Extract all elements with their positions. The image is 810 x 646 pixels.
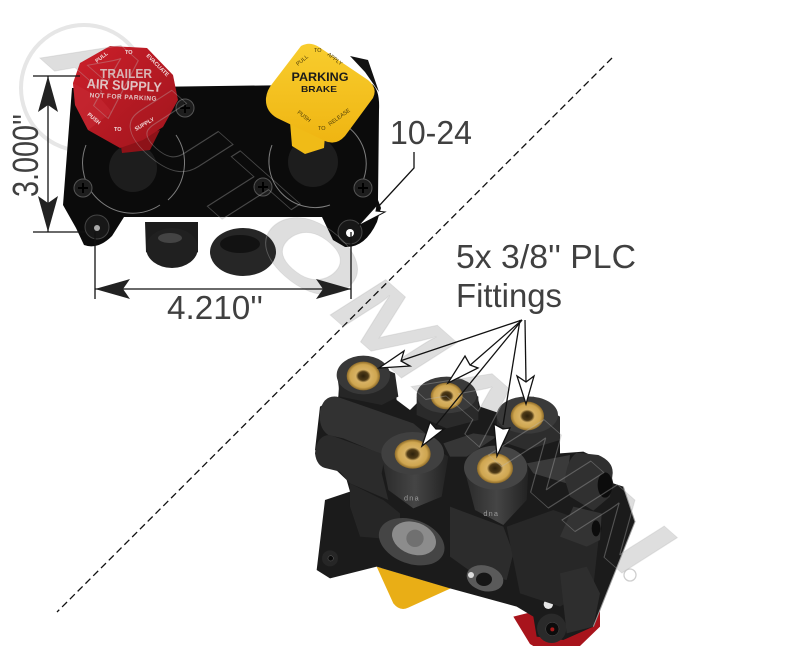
callout: 10-24 thread [358,114,472,226]
dimension: 3.000 height [5,76,85,232]
red knob: trailer air supply: AIR SUPPLY [86,76,162,95]
watermark logo: AUTOMANN [27,0,691,601]
top view: dash valve [63,44,381,276]
PLC fitting 1 [337,356,398,405]
yellow knob: parking brake: TO [314,48,322,54]
yellow knob: parking brake: APPLY [326,52,343,67]
watermark logo [21,0,691,601]
bottom view: valve body [315,356,635,646]
dimension: 3.000 height: 3.000'' [5,114,46,197]
red knob: trailer air supply: TO [114,127,122,133]
yellow knob: parking brake: TO [318,126,326,132]
yellow knob: parking brake: RELEASE [328,108,352,128]
connecting tube [443,433,497,457]
base plate and body silhouette [315,357,635,640]
arrow to fitting 4 [422,320,522,446]
small side port [464,561,506,595]
red knob behind [513,607,600,646]
yellow knob: parking brake: PARKING [292,72,349,84]
mounting plate [63,84,381,247]
yellow knob: parking brake: BRAKE [301,84,337,94]
arrow to fitting 3 [517,320,534,404]
red knob: trailer air supply: TO [125,50,133,56]
yellow knob: parking brake [266,44,379,154]
callout: fittings label: 5x 3/8'' PLC [456,238,636,275]
red knob: trailer air supply: PUSH [86,112,101,126]
mounting holes [85,215,362,244]
red knob: trailer air supply: NOT FOR PARKING [89,92,157,103]
red knob: trailer air supply: EVACUATE [145,53,170,78]
PLC fitting 3 [497,396,560,450]
dimension: 4.210 width [95,232,351,326]
arrows to fittings [379,320,534,456]
yellow knob behind [377,567,451,609]
arrow to fitting 1 [379,320,522,368]
PLC fitting 4: dna [404,494,420,503]
callout: fittings label: Fittings [456,277,562,314]
PLC fitting 4 [381,432,448,508]
upper tube [320,397,433,455]
red knob: trailer air supply: SUPPLY [134,117,156,133]
lower barrels [350,483,600,633]
plate mount details [322,550,566,643]
watermark overlay on dark parts: AUTOMANN [27,0,691,601]
arrow to fitting 5 [494,320,520,456]
diaphragm port [372,509,451,574]
callout: fittings label [456,238,636,314]
knob recess rings [83,125,366,213]
red knob: trailer air supply: PULL [95,51,110,65]
dimension: 4.210 width: 4.210'' [167,289,263,326]
callout: 10-24 thread: 10-24 [390,114,472,151]
arrow to fitting 2 [448,320,522,383]
yellow knob: parking brake: PULL [295,54,310,68]
red knob: trailer air supply: TRAILER [100,66,153,81]
red knob: trailer air supply [73,46,178,153]
yellow knob: parking brake: PUSH [296,110,312,124]
bottom fittings, top view [145,222,276,276]
plate edge [593,487,635,627]
knob stems [109,137,338,192]
PLC fitting 2 [417,377,478,428]
side port tube [527,453,613,547]
PLC fitting 5: dna [483,509,499,518]
diagonal dashed divider [57,58,612,612]
PLC fitting 5 [464,446,528,525]
screws [74,99,372,197]
lower tube [315,435,388,500]
